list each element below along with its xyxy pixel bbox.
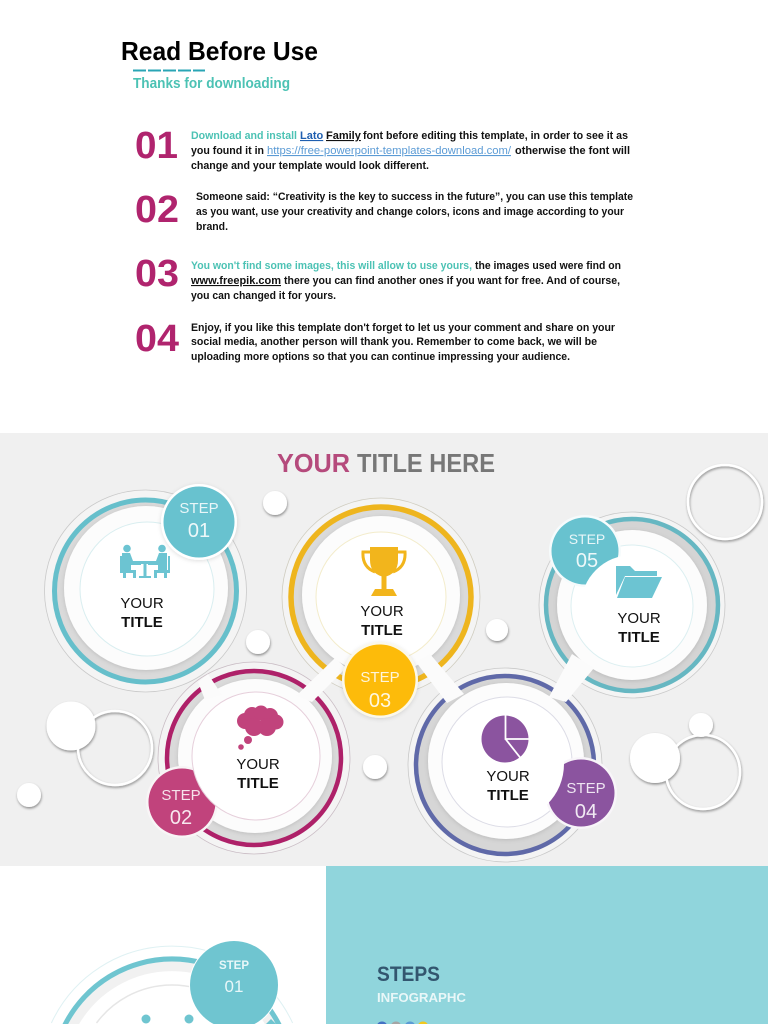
step 01 badge: 01 (188, 520, 210, 542)
item 04: 04 (135, 318, 179, 360)
item 04: uploading more options so that you can continue impressing your audience. (191, 351, 570, 363)
item 01: 01 (135, 125, 178, 167)
dashed accent line (133, 70, 205, 72)
step 04 badge: 04 (575, 801, 597, 823)
step 02 badge: STEP (161, 787, 201, 804)
decorative bubbles (17, 465, 762, 809)
item 01: font before editing this template, in order to see it as (363, 130, 628, 142)
label: YOUR (236, 756, 280, 773)
step 03 circle: TITLE (361, 622, 403, 639)
step 01 badge: STEP (179, 500, 219, 517)
item 01: Family (326, 130, 362, 142)
step 05 badge (549, 515, 683, 657)
icon: pie chart (482, 715, 528, 762)
step 03 circle (282, 498, 480, 696)
item 02: brand. (196, 221, 228, 233)
preview badge: STEP (219, 960, 249, 972)
item 01: Download and install (191, 130, 297, 142)
colour dots (377, 1022, 428, 1024)
item 01: change and your template would look different. (191, 160, 429, 172)
preview badge: 01 (225, 977, 243, 996)
label: YOUR (360, 603, 404, 620)
icon: trophy (363, 547, 405, 596)
label: YOUR (486, 768, 530, 785)
item 01: otherwise the font will (515, 145, 630, 157)
preview circle (51, 940, 293, 1024)
step 02 badge: 02 (170, 807, 192, 829)
step 03 badge: STEP (360, 669, 400, 686)
item 03 (135, 253, 621, 302)
item 04: Enjoy, if you like this template don't forget to let us your comment and share on your (191, 322, 616, 334)
step 04 badge (450, 707, 617, 829)
step 05 badge: STEP (569, 531, 605, 547)
item 02: Someone said: “Creativity is the key to success in the future”, you can use this template (196, 191, 633, 203)
icon: people at table (120, 545, 170, 578)
section: read before use (121, 36, 633, 363)
icon: people heads (142, 1014, 194, 1024)
item 01: Lato (300, 130, 324, 142)
subheading: thanks for downloading: Thanks for downloading (133, 75, 290, 92)
step 03 badge: 03 (369, 690, 391, 712)
item 01: you found it in (191, 145, 264, 157)
step 05 badge: 05 (576, 550, 598, 572)
label: YOUR (120, 595, 164, 612)
step 02 circle (146, 658, 350, 854)
icon: folder (616, 566, 662, 598)
item 02: 02 (135, 189, 179, 231)
item 04: social media, another person will thank you. Remember to come back, we will be (191, 336, 597, 348)
step 04 badge: STEP (566, 780, 606, 797)
item 03: 03 (135, 253, 179, 295)
subheading: infographc: INFOGRAPHC (377, 990, 467, 1005)
step 05 circle: TITLE (618, 629, 660, 646)
step 01 circle (44, 484, 246, 692)
step 03 badge (342, 642, 418, 718)
step 01 badge (161, 484, 237, 560)
icon: thought cloud (237, 706, 284, 750)
item 03: there you can find another ones if you want for free. And of course, (284, 275, 620, 287)
connector strips (416, 654, 594, 703)
item 04 (135, 318, 616, 363)
panel: steps infographic preview (0, 866, 768, 1024)
step 01 circle: TITLE (121, 614, 163, 631)
item 03: you can changed it for yours. (191, 290, 336, 302)
item 03: www.freepik.com (190, 275, 281, 287)
item 01 (135, 125, 630, 172)
step 04 circle: TITLE (487, 787, 529, 804)
item 03: You won't find some images, this will allow to use yours, (191, 260, 472, 272)
item 02 (135, 189, 633, 233)
connector strips (198, 658, 346, 702)
preview badge (189, 940, 279, 1024)
diagram title: YOUR (277, 448, 350, 478)
item 01: https://free-powerpoint-templates-download.com/ (267, 145, 512, 157)
heading: steps: STEPS (377, 963, 440, 986)
panel: five steps diagram (0, 433, 768, 866)
diagram title (277, 448, 495, 478)
step 05 circle (539, 512, 725, 698)
item 02: as you want, use your creativity and change colors, icons and image according to your (196, 206, 625, 218)
step 04 circle (408, 654, 617, 862)
diagram title: TITLE HERE (357, 448, 495, 478)
step 02 circle: TITLE (237, 775, 279, 792)
item 03: the images used were find on (475, 260, 621, 272)
step 02 badge (146, 692, 320, 838)
label: YOUR (617, 610, 661, 627)
heading: read before use: Read Before Use (121, 36, 318, 66)
